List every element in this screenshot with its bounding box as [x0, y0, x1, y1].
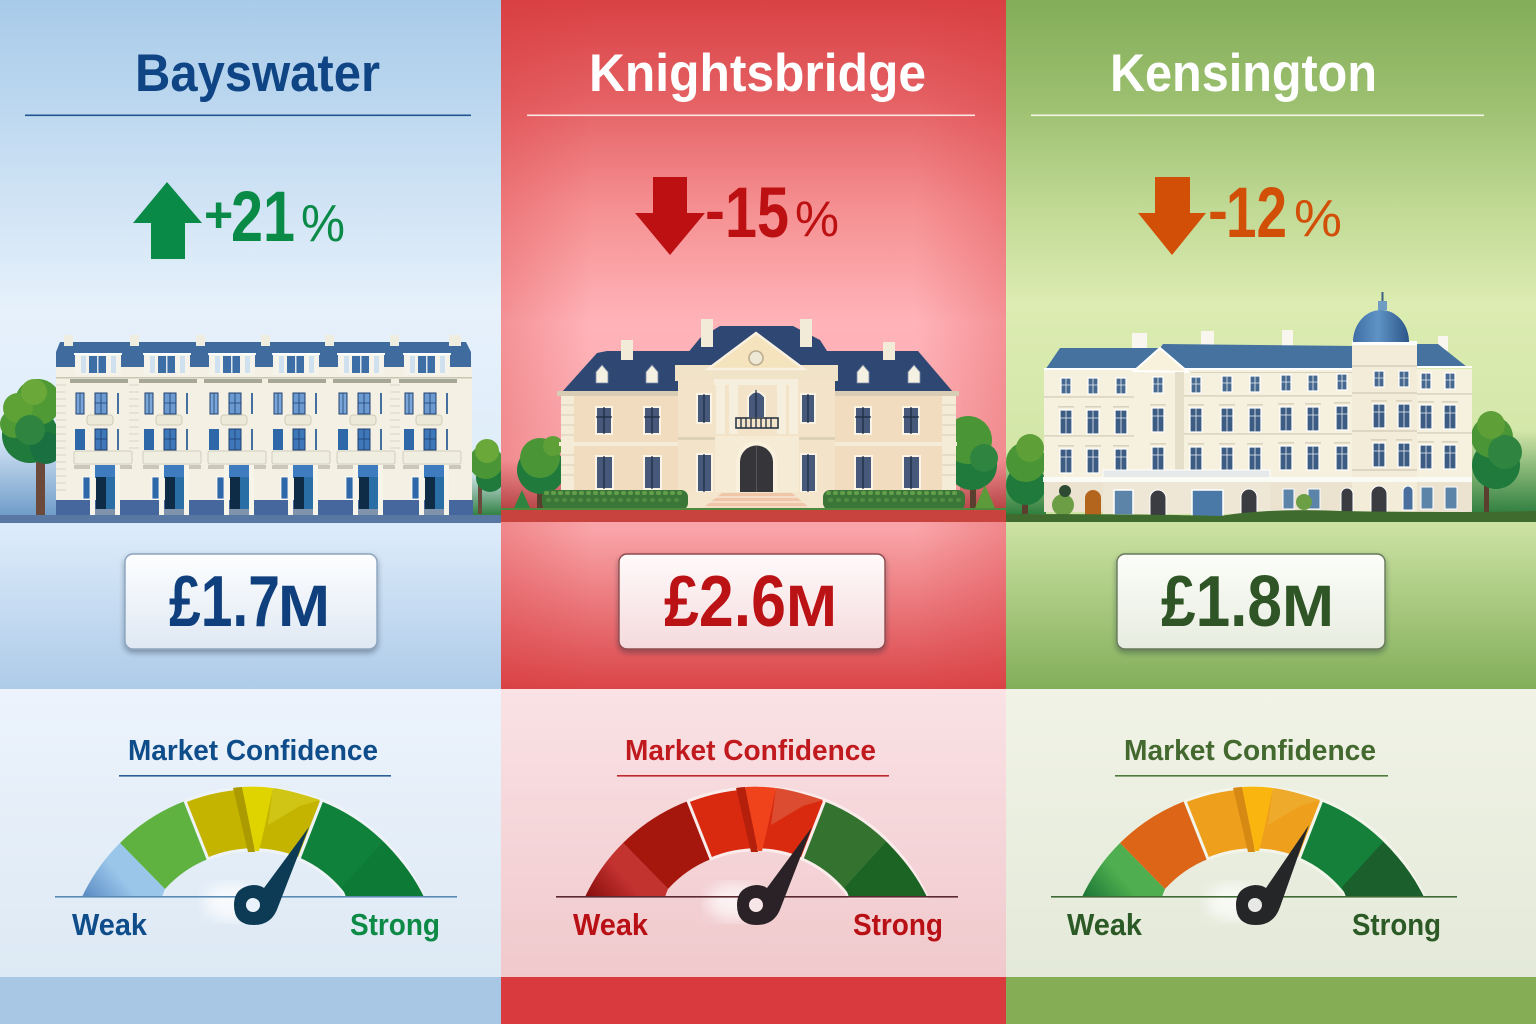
ground strip	[1006, 510, 1536, 522]
price card	[125, 554, 377, 649]
price card: M	[1282, 574, 1334, 639]
heading rule	[25, 114, 471, 116]
price card: £2.6	[664, 562, 786, 642]
icon: up arrow	[133, 182, 202, 259]
change: +21%: +	[204, 187, 233, 243]
price card: M	[278, 574, 330, 639]
price card	[619, 554, 885, 649]
background haze behind terrace	[0, 430, 60, 516]
change: -15%: 15	[725, 174, 789, 253]
change: -12%: %	[1294, 190, 1342, 248]
hedges	[542, 490, 965, 510]
background foliage haze	[1006, 430, 1536, 514]
gauge	[556, 787, 958, 925]
icon: tree right	[469, 430, 505, 520]
confidence panel	[0, 689, 501, 977]
illustration: mansion	[557, 319, 959, 510]
price card	[1117, 554, 1385, 649]
change: -12%	[1208, 174, 1342, 253]
label: Strong: Strong	[1352, 907, 1441, 942]
label rule	[617, 775, 889, 777]
edge vignette	[501, 0, 1006, 689]
panel background	[1006, 0, 1536, 689]
label: Market Confidence: Market Confidence	[128, 735, 378, 767]
panel background	[0, 0, 501, 689]
change: -12%: 12	[1226, 174, 1287, 253]
ground strip	[0, 515, 501, 523]
icon: tree right	[1471, 411, 1522, 512]
panel: Bayswater	[0, 0, 505, 1024]
ground strip	[501, 508, 1006, 522]
footer strip	[0, 977, 501, 1024]
label: Market Confidence: Market Confidence	[1124, 735, 1376, 767]
icon: tree left	[1006, 434, 1046, 514]
price card: £1.8	[1161, 562, 1282, 642]
ground haze	[501, 460, 1006, 510]
label: Weak: Weak	[1067, 907, 1143, 942]
label: Weak: Weak	[573, 907, 649, 942]
panel background	[501, 0, 1006, 689]
icon: down arrow	[1138, 177, 1206, 255]
change: +21%: 21	[231, 178, 295, 257]
label: Strong: Strong	[350, 907, 440, 942]
price card: M	[786, 574, 837, 639]
label: Strong: Strong	[853, 907, 943, 942]
label rule	[1115, 775, 1388, 777]
label rule	[119, 775, 391, 777]
change: +21%	[204, 178, 345, 257]
gauge	[1051, 787, 1457, 925]
change: -15%: %	[795, 191, 839, 247]
change: -15%	[705, 174, 839, 253]
illustration: terrace building	[56, 335, 473, 516]
label: Market Confidence: Market Confidence	[625, 735, 876, 767]
price card: £1.7	[169, 562, 280, 642]
heading: Knightsbridge: Knightsbridge	[589, 44, 926, 103]
icon: tree left	[0, 379, 62, 515]
change: -12%: -	[1208, 177, 1228, 244]
heading rule	[1031, 114, 1484, 116]
heading: Bayswater: Bayswater	[135, 44, 380, 103]
icon: tree right	[944, 416, 998, 510]
confidence panel	[1006, 689, 1536, 977]
panel: Kensington	[1006, 0, 1536, 1024]
icon: down arrow	[635, 177, 705, 255]
footer strip	[1006, 977, 1536, 1024]
icon: tree left	[514, 436, 565, 510]
gauge	[55, 787, 457, 925]
change: -15%: -	[705, 177, 725, 244]
change: +21%: %	[301, 195, 345, 253]
heading: Kensington: Kensington	[1110, 44, 1377, 103]
panel: Knightsbridge	[501, 0, 1006, 1024]
footer strip	[501, 977, 1006, 1024]
illustration: domed building	[1043, 292, 1472, 517]
label: Weak: Weak	[72, 907, 148, 942]
heading rule	[527, 114, 975, 116]
confidence panel	[501, 689, 1006, 977]
